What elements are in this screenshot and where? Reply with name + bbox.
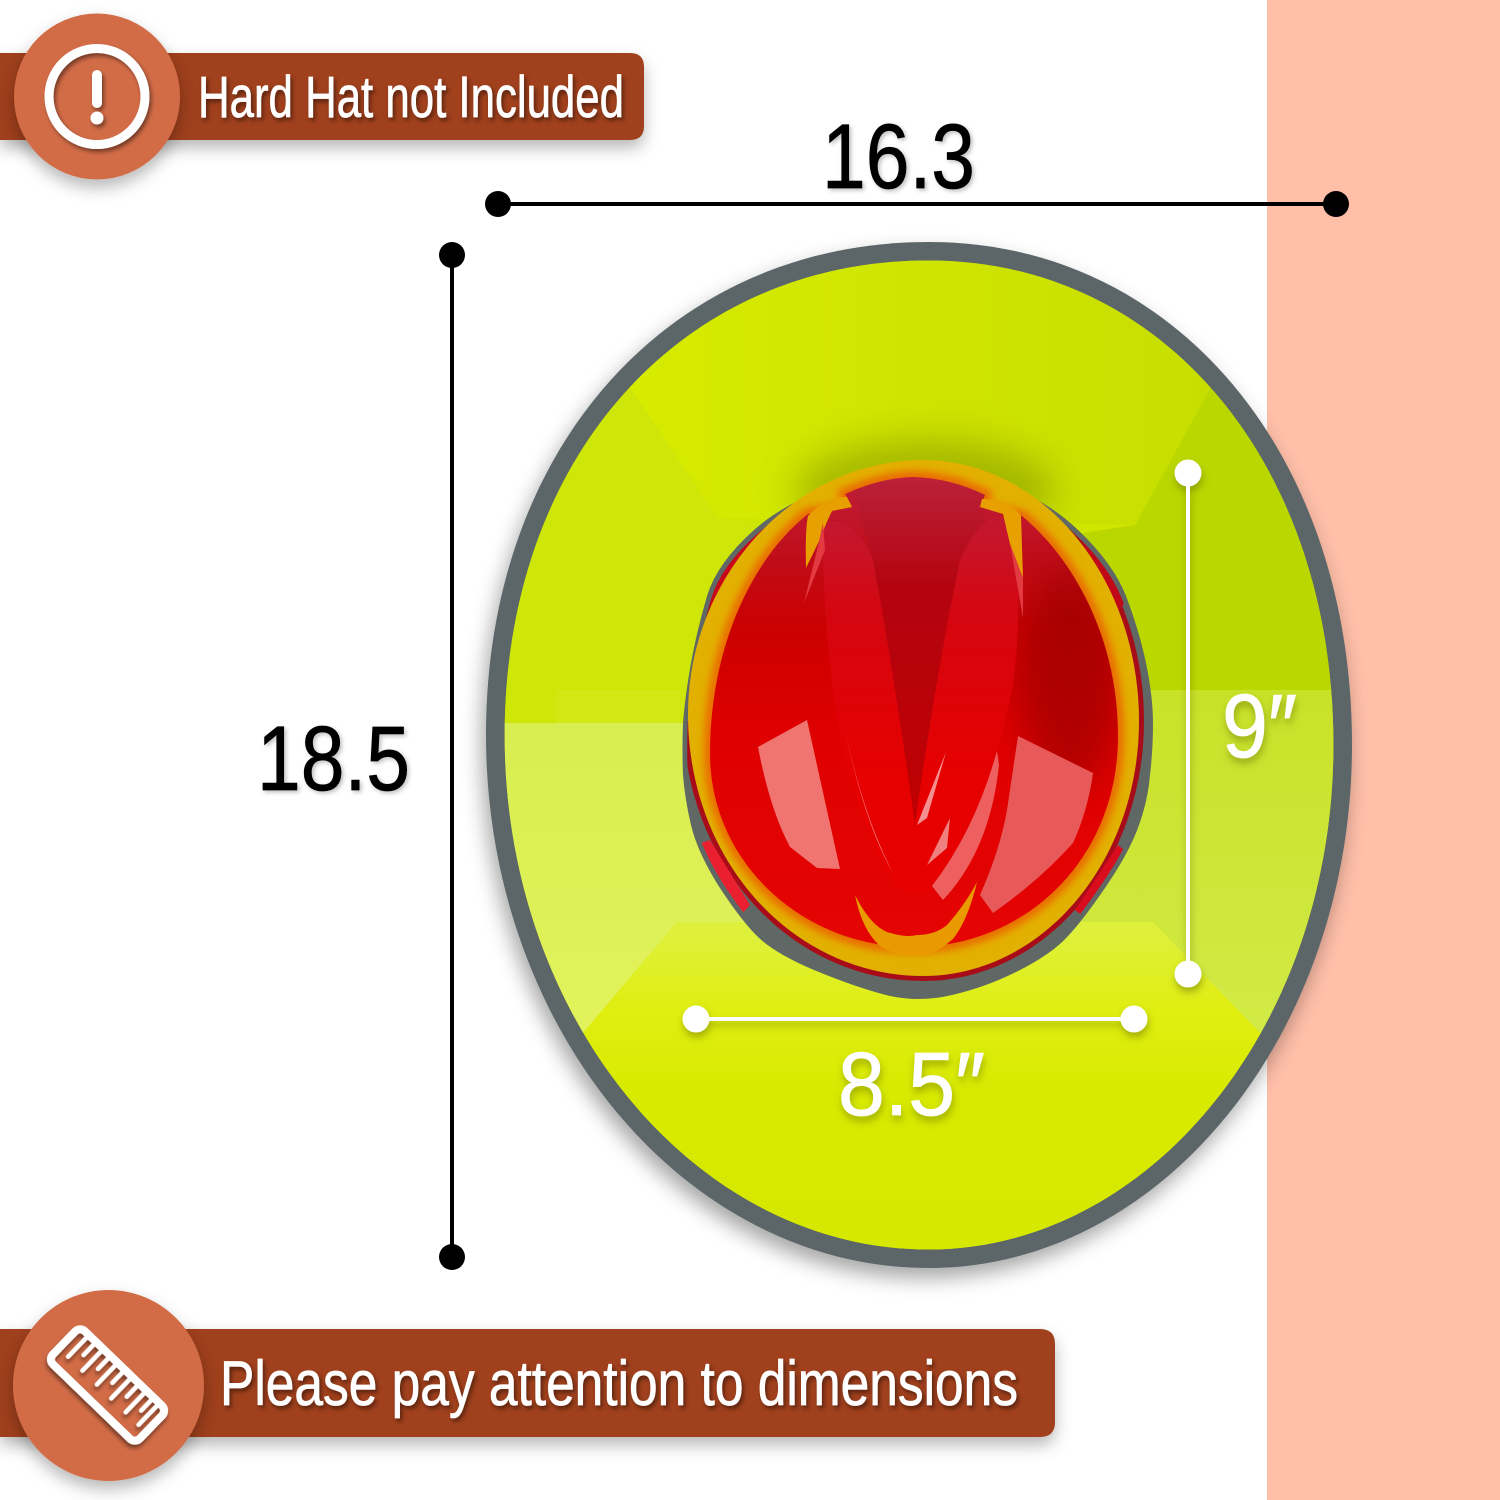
dark right shading bbox=[1020, 570, 1120, 790]
central V ridges bbox=[824, 518, 1018, 830]
banner text: Hard Hat not Included bbox=[198, 65, 624, 130]
central trough bbox=[850, 480, 985, 830]
bottom orange crescent bbox=[855, 882, 977, 956]
peach side panel bbox=[1267, 0, 1500, 1500]
brim lime fabric panels bbox=[504, 260, 1334, 1250]
red hard hat top view bbox=[682, 460, 1153, 999]
red crown shell bbox=[700, 470, 1130, 960]
icon: exclamation in circle bbox=[14, 14, 180, 180]
banner: please pay attention to dimensions bbox=[0, 1290, 1055, 1481]
grey inner collar bbox=[682, 465, 1153, 999]
line and end dots bbox=[485, 191, 1349, 217]
orange translucent rim bbox=[688, 460, 1139, 976]
banner text: Please pay attention to dimensions bbox=[220, 1349, 1018, 1419]
shadow above helmet bbox=[795, 440, 1055, 540]
left pink reflection bbox=[758, 720, 840, 869]
label 8.5 inch: 8.5″ bbox=[838, 1035, 985, 1135]
banner bar bbox=[0, 1329, 1055, 1437]
right pink reflection bbox=[980, 736, 1093, 913]
dimension: crown depth 9 inch bbox=[1174, 460, 1297, 988]
white line and end dots bbox=[1174, 460, 1202, 988]
dimension: height 18.5 bbox=[257, 242, 465, 1270]
orange inner glow of rim bbox=[710, 477, 1118, 947]
label 18.5: 18.5 bbox=[257, 708, 410, 810]
ridge glints bbox=[840, 706, 893, 873]
label 16.3: 16.3 bbox=[822, 106, 975, 208]
line and end dots bbox=[439, 242, 465, 1270]
white line and end dots bbox=[682, 1006, 1148, 1032]
brim grey edge binding bbox=[486, 242, 1352, 1268]
banner bar bbox=[0, 53, 644, 140]
top orange ribs bbox=[806, 497, 852, 568]
ridge highlight bbox=[932, 751, 999, 900]
red side vent tabs and under-rim band bbox=[687, 527, 1144, 981]
dimension: crown width 8.5 inch bbox=[682, 1006, 1148, 1135]
icon: ruler in circle bbox=[13, 1290, 204, 1481]
label 9 inch: 9″ bbox=[1222, 677, 1297, 777]
banner: hard hat not included bbox=[0, 14, 644, 180]
hat brim bbox=[480, 240, 1360, 1280]
dimension: width 16.3 bbox=[485, 106, 1349, 217]
